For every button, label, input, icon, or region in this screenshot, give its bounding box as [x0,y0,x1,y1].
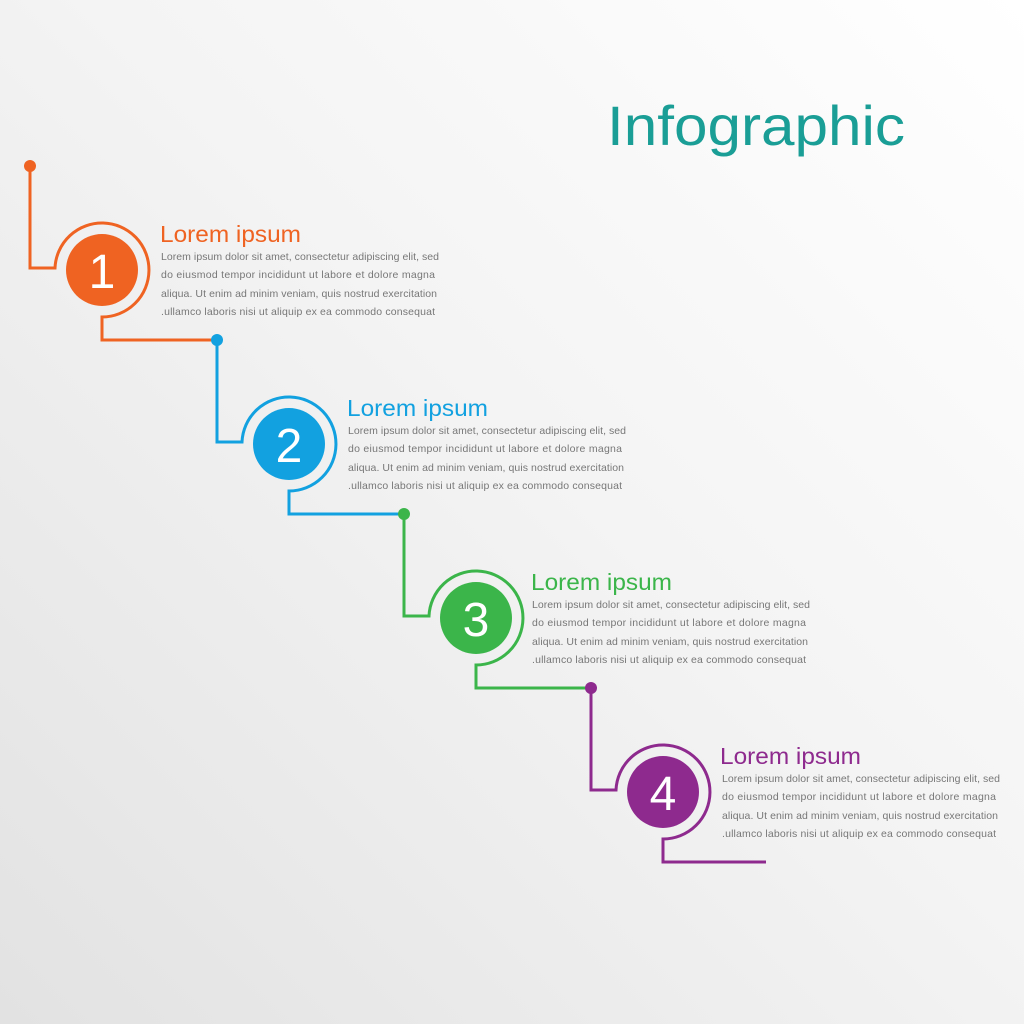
step 1 [24,160,439,340]
number badge 3: 3 [463,594,489,647]
text block 3: do eiusmod tempor incididunt ut labore et dolore magna [532,617,806,629]
number badge 2 [253,408,325,480]
text block 4 [720,743,1000,840]
connector line 2 [217,340,399,514]
text block 3: .ullamco laboris nisi ut aliquip ex ea commodo consequat [532,654,806,666]
text block 2 [347,395,626,492]
connector line 4 [591,688,766,862]
text block 3: aliqua. Ut enim ad minim veniam, quis nostrud exercitation [532,636,808,648]
text block 3 [531,569,810,666]
text block 1 [160,221,439,318]
text block 2: do eiusmod tempor incididunt ut labore et dolore magna [348,443,622,455]
text block 3: Lorem ipsum dolor sit amet, consectetur adipiscing elit, sed [532,599,810,611]
text block 4: Lorem ipsum dolor sit amet, consectetur adipiscing elit, sed [722,773,1000,785]
text block 2: Lorem ipsum dolor sit amet, consectetur adipiscing elit, sed [348,425,626,437]
number badge 2: 2 [276,420,302,473]
step 2 [211,334,626,514]
step 4 [585,682,1000,862]
title: Infographic [607,94,905,157]
text block 1: .ullamco laboris nisi ut aliquip ex ea commodo consequat [161,306,435,318]
text block 2: aliqua. Ut enim ad minim veniam, quis nostrud exercitation [348,462,624,474]
number badge 1 [66,234,138,306]
step 3 [398,508,810,688]
text block 1: aliqua. Ut enim ad minim veniam, quis nostrud exercitation [161,288,437,300]
text block 2: Lorem ipsum [347,395,488,421]
text block 1: Lorem ipsum dolor sit amet, consectetur adipiscing elit, sed [161,251,439,263]
text block 4: Lorem ipsum [720,743,861,769]
text block 1: Lorem ipsum [160,221,301,247]
text block 1: do eiusmod tempor incididunt ut labore et dolore magna [161,269,435,281]
text block 4: do eiusmod tempor incididunt ut labore et dolore magna [722,791,996,803]
number badge 4 [627,756,699,828]
connector line 3 [404,514,586,688]
text block 4: aliqua. Ut enim ad minim veniam, quis nostrud exercitation [722,810,998,822]
number badge 3 [440,582,512,654]
connector line 1 [30,166,212,340]
text block 3: Lorem ipsum [531,569,672,595]
text block 2: .ullamco laboris nisi ut aliquip ex ea commodo consequat [348,480,622,492]
number badge 1: 1 [89,246,115,299]
number badge 4: 4 [650,768,676,821]
text block 4: .ullamco laboris nisi ut aliquip ex ea commodo consequat [722,828,996,840]
